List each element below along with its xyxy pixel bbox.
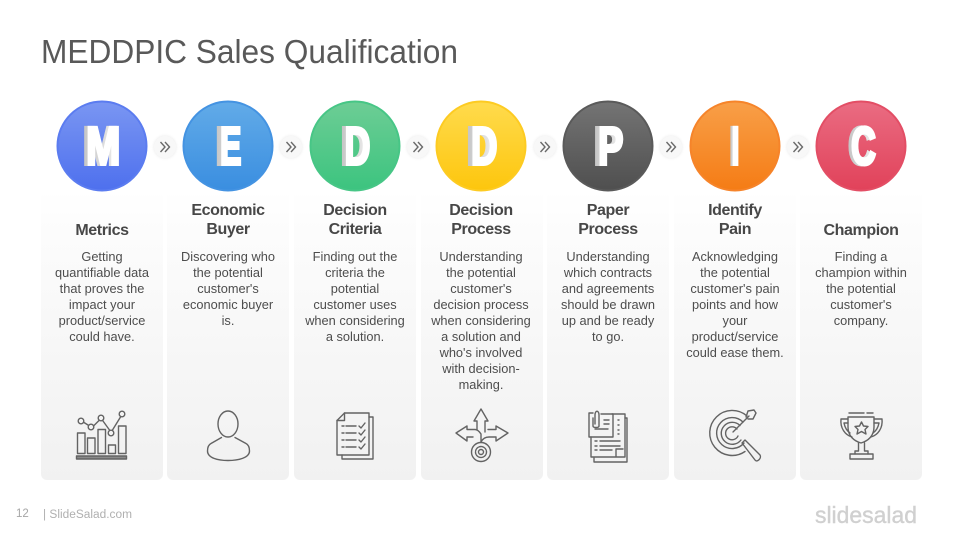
heading: Economic Buyer	[191, 202, 265, 238]
text: economic buyer description: customer's	[197, 281, 259, 296]
text: decision process description: a solution and	[441, 329, 521, 344]
panel: identify pain	[674, 102, 796, 480]
panel: champion	[800, 102, 922, 480]
icon: trophy	[841, 413, 882, 459]
text: decision process description: who's involved	[439, 345, 522, 360]
text: metrics description: Getting	[81, 249, 123, 264]
text: identify pain description: your	[723, 313, 748, 328]
text: identify pain description: Acknowledging	[692, 249, 778, 264]
circle: E: E	[216, 116, 238, 176]
heading: Champion: Champion	[823, 222, 899, 239]
arrow: identify pain to champion	[786, 136, 810, 158]
icon: person	[208, 411, 250, 460]
circle: M: M	[86, 116, 120, 176]
text: champion description: company.	[834, 313, 888, 328]
text: champion description: customer's	[830, 297, 892, 312]
text: identify pain description: customer's pain	[690, 281, 780, 296]
circle: D: D	[466, 116, 494, 176]
text: identify pain description: could ease them.	[686, 345, 784, 360]
text: champion description: the potential	[826, 281, 896, 296]
arrow: decision criteria to decision process	[406, 136, 430, 158]
text: decision process description: the potential	[446, 265, 516, 280]
circle: P	[564, 102, 652, 190]
arrow: paper process to identify pain	[660, 136, 682, 158]
text: champion description	[815, 249, 907, 328]
circle: D	[436, 102, 526, 190]
text: identify pain description: product/service	[692, 329, 778, 344]
text: decision process description: making.	[459, 377, 503, 392]
text: metrics description: product/service	[59, 313, 145, 328]
text: economic buyer description: is.	[222, 313, 234, 328]
arrow: metrics to economic buyer	[154, 136, 176, 158]
panel: paper process	[547, 102, 669, 480]
heading: Paper Process: Process	[578, 221, 638, 238]
circle: C: C	[848, 116, 873, 176]
text: decision criteria description: a solution.	[326, 329, 384, 344]
text: decision process description: Understanding	[439, 249, 523, 264]
text: metrics description: quantifiable data	[55, 265, 150, 280]
heading: Decision Criteria: Criteria	[329, 221, 382, 238]
text: decision process description: decision process	[433, 297, 529, 312]
icon: bar chart	[76, 411, 126, 459]
panel: economic buyer	[167, 102, 289, 480]
circle: P: P	[594, 116, 620, 176]
heading: Identify Pain: Pain	[719, 221, 751, 238]
text: decision process description	[430, 249, 531, 392]
heading: Decision Criteria	[323, 202, 387, 238]
text: identify pain description: the potential	[700, 265, 770, 280]
text: paper process description: should be drawn	[561, 297, 655, 312]
text: paper process description: up and be ready	[562, 313, 655, 328]
text: decision process description: customer's	[450, 281, 512, 296]
circle: I: I	[732, 116, 740, 176]
heading: Paper Process	[578, 202, 638, 238]
text: economic buyer description: economic buyer	[183, 297, 274, 312]
arrow: economic buyer to decision criteria	[280, 136, 302, 158]
text: economic buyer description	[181, 249, 275, 328]
text: decision process description: when considering	[430, 313, 531, 328]
text: champion description: champion within	[815, 265, 907, 280]
text: economic buyer description: Discovering who	[181, 249, 275, 264]
text: metrics description	[55, 249, 150, 344]
heading: Economic Buyer: Buyer	[206, 221, 250, 238]
heading: Economic Buyer: Economic	[191, 202, 265, 219]
panel: decision criteria	[294, 102, 416, 480]
circle: M: M	[82, 116, 118, 176]
text: decision criteria description: customer uses	[313, 297, 397, 312]
heading: Identify Pain	[708, 202, 762, 238]
circle: C: C	[851, 116, 876, 176]
text: identify pain description: points and how	[692, 297, 779, 312]
title: MEDDPIC Sales Qualification	[41, 33, 458, 70]
heading: Decision Process: Process	[451, 221, 511, 238]
text: metrics description: that proves the	[60, 281, 144, 296]
text: paper process description	[561, 249, 655, 344]
icon: target with magnifier	[710, 410, 760, 461]
text: metrics description: could have.	[69, 329, 135, 344]
circle: C	[816, 102, 906, 190]
circle: I: I	[729, 116, 739, 176]
text: decision criteria description	[304, 249, 405, 344]
icon: clipped papers	[589, 411, 627, 462]
text: champion description: Finding a	[835, 249, 888, 264]
text: decision criteria description: Finding out the	[313, 249, 397, 264]
text: paper process description: and agreements	[562, 281, 654, 296]
text: identify pain description	[686, 249, 784, 360]
heading: Decision Criteria: Decision	[323, 202, 387, 219]
circle: E: E	[220, 116, 242, 176]
text: paper process description: which contracts	[563, 265, 652, 280]
page number: 12	[16, 508, 29, 520]
heading: Decision Process: Decision	[449, 202, 513, 219]
text: decision criteria description: criteria the	[325, 265, 385, 280]
footer source: | SlideSalad.com	[43, 509, 132, 521]
icon: checklist document	[337, 413, 373, 459]
text: metrics description: impact your	[69, 297, 136, 312]
heading: Decision Process	[449, 202, 513, 238]
icon: diverging arrows with gear	[456, 409, 508, 462]
arrow: decision process to paper process	[534, 136, 556, 158]
circle: P: P	[598, 116, 624, 176]
text: decision process description: with decision-	[441, 361, 520, 376]
text: decision criteria description: when considering	[304, 313, 405, 328]
panel: decision process	[421, 102, 543, 480]
circle: D: D	[344, 116, 370, 176]
text: decision criteria description: potential	[331, 281, 379, 296]
circle: M	[58, 102, 146, 190]
circle: I	[690, 102, 780, 190]
heading: Metrics: Metrics	[75, 222, 129, 239]
heading: Identify Pain: Identify	[708, 202, 762, 219]
circle: E	[184, 102, 272, 190]
heading: Paper Process: Paper	[587, 202, 629, 219]
text: paper process description: to go.	[592, 329, 624, 344]
circle: D	[310, 102, 400, 190]
circle: D: D	[340, 116, 368, 176]
logo: slidesalad: slidesalad	[815, 502, 917, 528]
panel: metrics	[41, 102, 163, 480]
text: paper process description: Understanding	[566, 249, 650, 264]
circle: D: D	[471, 116, 498, 176]
text: economic buyer description: the potential	[193, 265, 263, 280]
